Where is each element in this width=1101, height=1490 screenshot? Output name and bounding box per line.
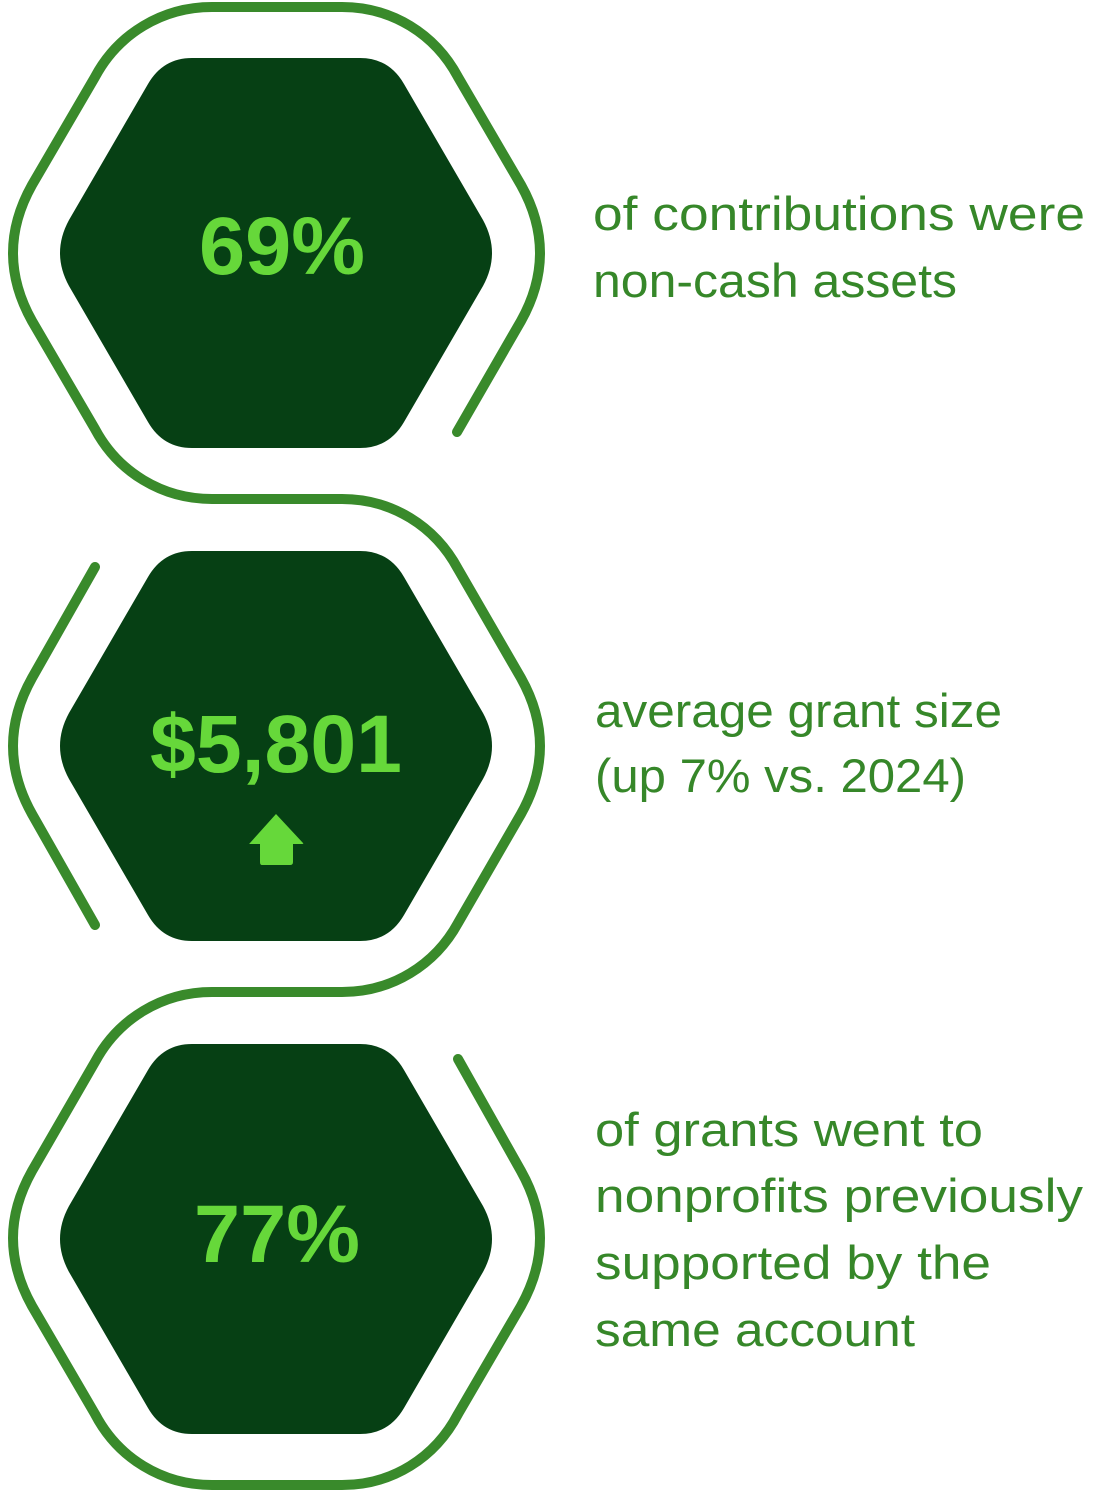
left ribbon segment beside middle hexagon <box>13 567 95 925</box>
text block: non-cash assets <box>593 187 1085 307</box>
text block: non-cash assets: non-cash assets <box>593 254 957 307</box>
statistic: 69%: 69% <box>199 201 365 292</box>
statistic: 77%: 77% <box>194 1189 360 1280</box>
text block: non-cash assets: of contributions were <box>593 187 1085 240</box>
panel: 69% hexagon <box>60 58 492 448</box>
text block: previously supported nonprofits: supported by the <box>595 1236 991 1289</box>
text block: previously supported nonprofits: nonprofits previously <box>595 1169 1084 1222</box>
text block: previously supported nonprofits: same account <box>595 1303 915 1356</box>
text block: average grant size: average grant size <box>595 684 1002 737</box>
panel: 77% hexagon <box>60 1044 492 1434</box>
text block: average grant size: (up 7% vs. 2024) <box>595 749 966 802</box>
text block: previously supported nonprofits <box>595 1103 1084 1356</box>
panel: $5,801 hexagon <box>60 551 492 941</box>
text block: previously supported nonprofits: of grants went to <box>595 1103 983 1156</box>
outer ribbon line connecting the hexagons <box>13 7 540 1485</box>
statistic: $5,801: $5,801 <box>150 699 402 790</box>
icon: up arrow <box>249 814 303 865</box>
text block: average grant size <box>595 684 1002 802</box>
